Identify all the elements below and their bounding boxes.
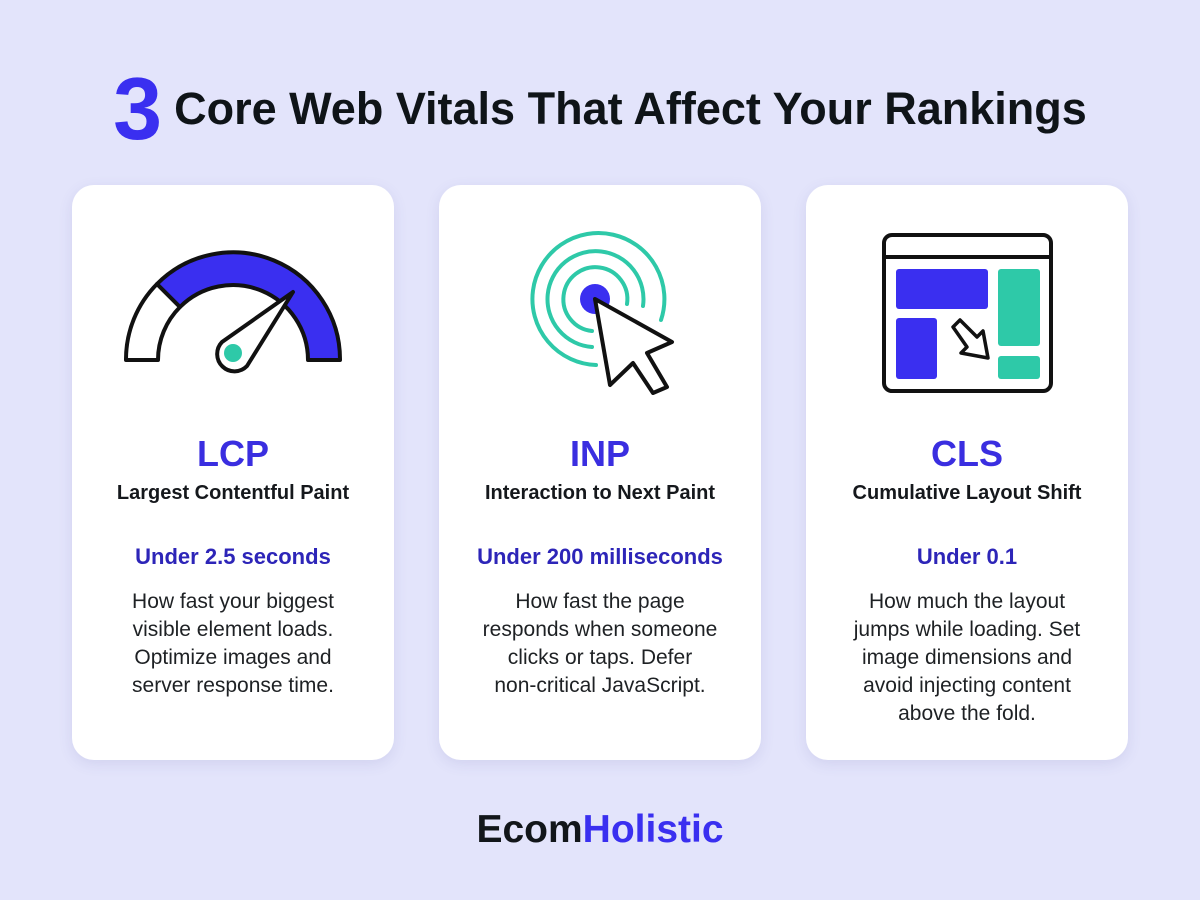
text: subtitle: Interaction to Next Paint [485,482,715,504]
panel: CLS [806,185,1128,760]
text: target: Under 0.1 [917,544,1017,569]
text: CLS: CLS [931,433,1003,474]
text: LCP: LCP [197,433,269,474]
text: subtitle: Largest Contentful Paint [117,482,349,504]
logo: EcomHolistic [476,808,724,851]
text: description: non-critical JavaScript. [494,674,706,697]
panel: LCP [72,185,394,760]
panel: INP [439,185,761,760]
text: target: Under 2.5 seconds [135,544,331,569]
icon: gauge [124,250,342,374]
text: description: clicks or taps. Defer [508,646,692,669]
text: description [483,590,717,697]
icon: click target [530,231,674,395]
text: subtitle: Cumulative Layout Shift [853,482,1081,504]
text: INP: INP [570,433,630,474]
text: description: How fast your biggest visible element loads. Optimize images and server response time. [132,590,334,697]
title: 3 Core Web Vitals That Affect Your Rankings [113,59,1087,158]
text: target: Under 200 milliseconds [477,544,723,569]
text: description: How much the layout jumps while loading. Set image dimensions and avoid injecting content above the fold. [854,590,1080,725]
text: description: How fast the page [515,590,685,613]
text: description: responds when someone [483,618,717,641]
icon: layout shift [882,233,1053,393]
